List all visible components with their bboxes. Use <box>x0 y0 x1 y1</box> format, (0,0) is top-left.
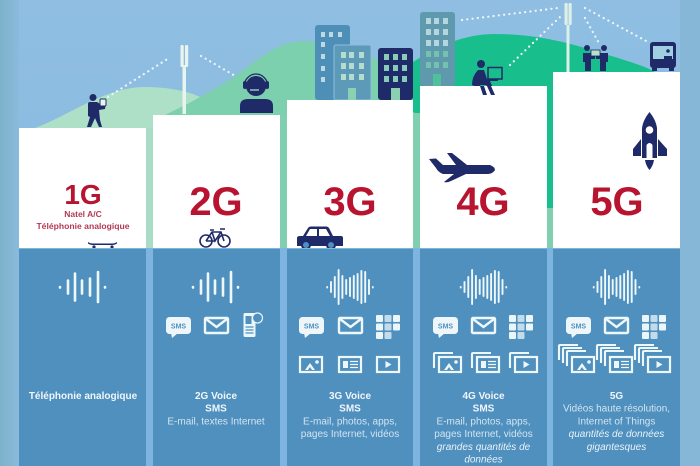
panel: 3G bottom <box>287 249 413 466</box>
icon: skateboard <box>88 242 117 249</box>
text: 1G: Téléphonie analogique <box>29 391 138 402</box>
icon: SMS: SMS <box>438 324 453 330</box>
panel: 2G bottom <box>153 249 280 466</box>
panel base strip <box>0 248 700 466</box>
text: 3G: E-mail, photos, apps, <box>303 416 397 428</box>
icon: apps grid <box>376 315 400 339</box>
text: 4G <box>434 391 533 466</box>
text: 2G: SMS <box>205 404 227 414</box>
icon: video stack <box>510 353 537 372</box>
text: 4G: 4G Voice <box>462 391 505 402</box>
text: 5G: Internet of Things <box>578 416 655 428</box>
text: 2G: 2G Voice <box>195 391 237 402</box>
heading: 4G: 4G <box>456 180 510 224</box>
text: 3G: 3G Voice <box>329 391 371 402</box>
building: tall <box>420 12 455 86</box>
icon: video stack <box>635 345 670 372</box>
building: navy <box>378 48 413 100</box>
panel: 5G bottom <box>553 249 680 466</box>
building: back left <box>315 25 350 100</box>
right edge lower <box>680 248 700 466</box>
icon: voice wave 3G <box>327 270 373 304</box>
icon: rocket <box>633 112 667 170</box>
icon: voice wave 1G <box>60 272 105 302</box>
icon: headset person <box>240 74 273 113</box>
heading: 1G: 1G <box>64 179 102 210</box>
panel: 2G top <box>153 115 280 248</box>
text: 4G: données <box>464 454 503 466</box>
icon: voice wave 4G <box>461 270 506 304</box>
text: 3G: pages Internet, vidéos <box>301 429 399 440</box>
icon: envelope <box>205 318 228 333</box>
hills <box>35 34 655 249</box>
text: 2G: E-mail, textes Internet <box>167 416 265 428</box>
subtitle: téléphonie: Téléphonie analogique <box>36 221 130 231</box>
icon: image <box>300 357 322 372</box>
panel: 4G top <box>420 86 547 248</box>
icon: apps grid <box>509 315 533 339</box>
tower: 5G <box>564 3 572 72</box>
icon: laptop person legs over panel <box>480 86 495 95</box>
icon: SMS: SMS <box>571 324 586 330</box>
subtitle: 1G: Natel A/C <box>64 209 102 219</box>
icon: SMS <box>299 317 324 338</box>
text: 5G: quantités de données <box>569 429 664 440</box>
icon: video <box>377 357 399 372</box>
text: 5G: gigantesques <box>587 442 646 453</box>
icon: person with laptop <box>472 60 502 95</box>
icon: voice wave 5G <box>594 270 639 304</box>
text: 4G: pages Internet, vidéos <box>434 429 533 440</box>
panel: 5G top <box>553 72 680 248</box>
icon: article <box>339 357 361 372</box>
icon: phone <box>244 313 262 337</box>
icon: envelope <box>605 318 628 333</box>
light gaps <box>146 248 553 466</box>
icon: SMS <box>166 317 191 338</box>
buildings <box>315 12 455 100</box>
text: 5G: Vidéos haute résolution, <box>563 404 670 414</box>
icon: car <box>297 226 343 249</box>
icon: airplane <box>429 153 495 182</box>
icon: article stack <box>597 345 632 372</box>
tower: 2G <box>180 45 188 114</box>
text: 4G: E-mail, photos, apps, <box>437 416 530 428</box>
icon: person with phone <box>87 94 106 127</box>
icon: SMS: SMS <box>171 324 186 330</box>
icon: apps grid <box>642 315 666 339</box>
text: 3G <box>301 391 399 440</box>
text: 5G: 5G <box>610 391 623 402</box>
right edge band <box>680 0 700 466</box>
panel: 1G top <box>19 128 146 248</box>
icon: envelope <box>472 318 495 333</box>
icon: voice wave 2G <box>193 272 238 302</box>
icon: SMS <box>566 317 591 338</box>
icon: two people with tablet <box>583 45 608 71</box>
left edge band <box>0 0 19 466</box>
heading: 2G: 2G <box>189 180 243 224</box>
panel: 1G bottom <box>19 249 146 466</box>
text: 5G <box>563 391 670 453</box>
icon: envelope <box>339 318 362 333</box>
panel: 3G top <box>287 100 413 248</box>
building: front blue <box>334 45 371 100</box>
text: 2G <box>167 391 265 428</box>
signal dots <box>108 8 648 97</box>
panel: 4G bottom <box>420 249 547 466</box>
text: 3G: SMS <box>339 404 361 414</box>
heading: 5G: 5G <box>590 180 644 224</box>
text: 4G: SMS <box>473 404 495 414</box>
light lower gap strips <box>146 86 553 248</box>
icon: SMS: SMS <box>304 324 319 330</box>
left edge lower <box>0 248 19 466</box>
icon: SMS <box>433 317 458 338</box>
heading: 3G: 3G <box>323 180 377 224</box>
icon: bus <box>650 42 676 71</box>
icon: bicycle <box>200 229 230 247</box>
icon: article stack <box>472 353 499 372</box>
text: 4G: grandes quantités de <box>437 442 531 453</box>
icon: image stack <box>559 345 594 372</box>
icon: image stack <box>434 353 461 372</box>
